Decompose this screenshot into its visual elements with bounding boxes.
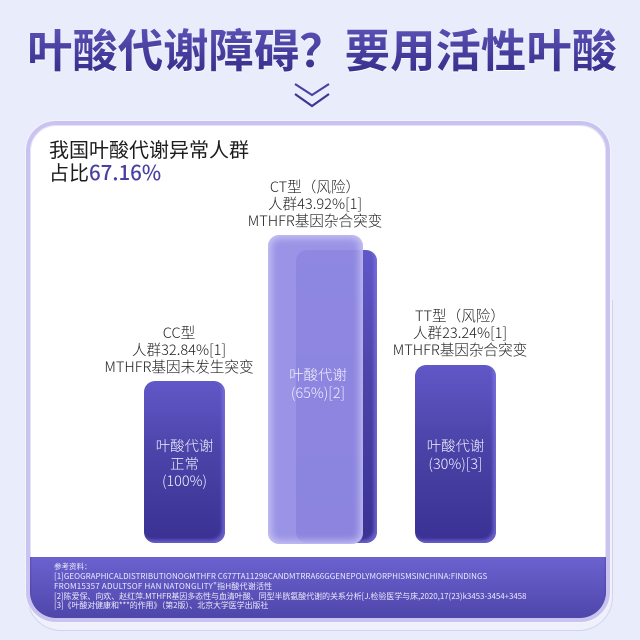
label: TT type: MTHFR基因杂合突变 bbox=[393, 339, 527, 360]
text: references bbox=[54, 561, 526, 611]
bar: CT back bar bbox=[296, 250, 377, 543]
decorative outer card shadow bbox=[27, 300, 613, 631]
panel: main card bbox=[26, 121, 610, 622]
bar: CT frosted glass overlay bbox=[268, 235, 363, 544]
reference heading: 参考资料： bbox=[54, 561, 92, 572]
label: CC type: MTHFR基因未发生突变 bbox=[104, 356, 254, 377]
reference 3: [3]《叶酸对健康和***的作用》（第2版）、北京大学医学出版社 bbox=[54, 600, 268, 611]
reference 1: [1]GEOGRAPHICALDISTRIBUTIONOGMTHFR C677TA11298CANDMTRRA66GGENEPOLYMORPHISMSINCHINA:FINDINGS bbox=[54, 571, 487, 582]
label: CC type: CC型 bbox=[163, 322, 195, 343]
text: TT bar: 叶酸代谢 bbox=[427, 435, 484, 456]
icon: double chevron arrow bbox=[294, 83, 330, 108]
panel: references footer background bbox=[30, 557, 606, 622]
text: CC bar: (100%) bbox=[162, 470, 207, 491]
text: CC bar: 正常 bbox=[170, 452, 199, 474]
title: 叶酸代谢障碍？要用活性叶酸 bbox=[27, 15, 617, 81]
text: CC bar: 叶酸代谢 bbox=[156, 435, 213, 456]
label: CC type: 人群32.84%[1] bbox=[132, 339, 226, 360]
text: CT bar: 叶酸代谢 bbox=[289, 364, 347, 385]
text: CC bar bbox=[156, 435, 213, 491]
heading: abnormal folate metabolism population bbox=[49, 134, 249, 186]
label: CC type bbox=[104, 322, 254, 377]
text: TT bar bbox=[427, 435, 484, 474]
label: TT type: 人群23.24%[1] bbox=[413, 322, 507, 343]
reference 2: [2]陈爱保、向欢、赵红萍.MTHFR基因多态性与血清叶酸、同型半胱氨酸代谢的关系分析[J.检验医学与床,2020,17(23)k3453-3454+3458 bbox=[54, 591, 526, 602]
reference 1 continued: FROM15357 ADULTSOF HAN NATONGLITY"指H酸代谢活性 bbox=[54, 581, 272, 592]
label: TT type bbox=[393, 305, 527, 360]
label: CT type: 人群43.92%[1] bbox=[268, 193, 362, 214]
text: CT bar: (65%)[2] bbox=[291, 382, 345, 402]
label: CT type bbox=[248, 176, 382, 231]
text: CT bar bbox=[289, 364, 347, 402]
label: CT type: MTHFR基因杂合突变 bbox=[248, 210, 382, 231]
label: TT type: TT型（风险） bbox=[415, 305, 505, 326]
bar: TT low bbox=[415, 365, 496, 543]
label: CT type: CT型（风险） bbox=[270, 176, 360, 197]
heading: abnormal folate metabolism population: 我国叶酸代谢异常人群 bbox=[49, 134, 249, 163]
bar: CC normal bbox=[144, 381, 225, 543]
heading: abnormal folate metabolism population: 占比67.16% bbox=[49, 156, 161, 186]
text: TT bar: (30%)[3] bbox=[428, 452, 483, 474]
